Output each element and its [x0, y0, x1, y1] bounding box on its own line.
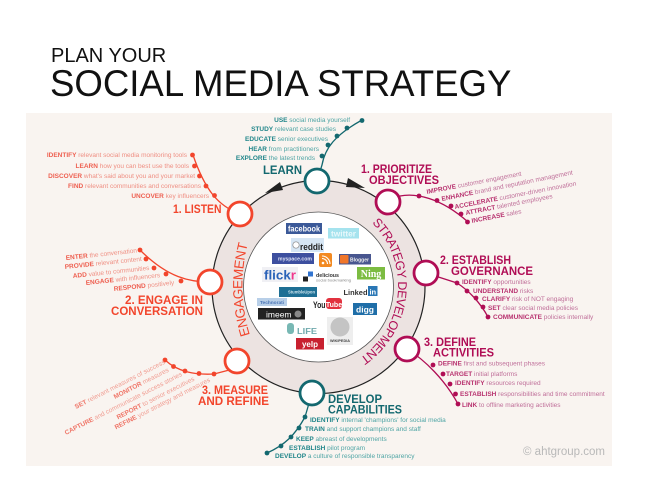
- prioritize items: [426, 169, 577, 225]
- listen items: FIND relevant communities and conversations: [68, 183, 202, 190]
- engage items: [64, 248, 175, 293]
- listen heading: 1. LISTEN: [173, 202, 222, 216]
- logo: reddit: reddit: [300, 242, 323, 252]
- develop items: ESTABLISH pilot program: [289, 445, 365, 452]
- learn heading: LEARN: [263, 163, 302, 177]
- develop heading: [328, 392, 402, 416]
- prioritize node: [376, 190, 400, 214]
- listen branch: [47, 152, 252, 226]
- logo: linkedin: Linked: [344, 288, 368, 297]
- develop items: [275, 417, 446, 460]
- define items: TARGET initial platforms: [446, 371, 518, 378]
- define items: IDENTIFY resources required: [455, 380, 541, 387]
- logo: second life: LIFE: [297, 327, 318, 336]
- measure heading: 3. MEASURE: [202, 383, 268, 397]
- logo: imeem: imeem: [266, 310, 292, 320]
- prioritize heading: [361, 162, 439, 187]
- prioritize items: ENHANCE brand and reputation management: [441, 169, 574, 203]
- logo: small blue badge: Technorati: [260, 300, 284, 305]
- governance heading: 2. ESTABLISH: [440, 253, 511, 267]
- engage items: PROVIDE relevant content: [64, 256, 142, 271]
- develop items: DEVELOP a culture of responsible transparency: [275, 453, 415, 460]
- define items: LINK to offline marketing activities: [462, 402, 561, 409]
- logo: rss: [319, 253, 332, 267]
- engage items: RESPOND positively: [113, 280, 175, 293]
- title: PLAN YOUR: [51, 45, 166, 67]
- engage heading: [111, 293, 203, 318]
- governance items: UNDERSTAND risks: [473, 288, 534, 295]
- logo: delicious: [303, 272, 351, 282]
- governance branch: [414, 253, 594, 321]
- define branch: [395, 335, 605, 409]
- define heading: ACTIVITIES: [433, 346, 494, 360]
- governance items: IDENTIFY opportunities: [462, 279, 531, 286]
- logo: youtube: You: [313, 300, 326, 310]
- measure items: [64, 359, 212, 437]
- listen node: [228, 202, 252, 226]
- logo: stumbleupon: StumbleUpon: [288, 290, 315, 294]
- prioritize heading: 1. PRIORITIZE: [361, 162, 432, 176]
- measure items: SET relevant measures of success: [74, 359, 167, 411]
- measure heading: [198, 383, 269, 408]
- measure heading: AND REFINE: [198, 394, 269, 408]
- measure branch: [64, 349, 269, 437]
- engage heading: 2. ENGAGE IN: [125, 293, 203, 307]
- logo: yelp: yelp: [302, 340, 318, 349]
- governance items: [462, 279, 594, 321]
- engage items: ADD value to communities: [72, 265, 150, 280]
- learn items: [236, 117, 350, 162]
- engage items: ENGAGE with influencers: [85, 272, 161, 287]
- learn node: [305, 169, 329, 193]
- measure items: REFINE your strategy and measures: [114, 376, 212, 431]
- title: SOCIAL MEDIA STRATEGY: [50, 63, 511, 104]
- measure items: REPORT to senior executives: [116, 376, 197, 421]
- learn items: EXPLORE the latest trends: [236, 155, 316, 162]
- logo: myspace: myspace.com: [278, 256, 312, 262]
- develop heading: CAPABILITIES: [328, 402, 402, 416]
- develop node: [300, 381, 324, 405]
- define heading: [424, 335, 494, 360]
- ring labels: ENGAGEMENT: [233, 242, 250, 336]
- engage node: [198, 270, 222, 294]
- branch dots: [455, 281, 490, 319]
- governance items: SET clear social media policies: [488, 305, 579, 312]
- engage heading: CONVERSATION: [111, 304, 203, 318]
- prioritize heading: OBJECTIVES: [369, 173, 439, 187]
- engage branch: [64, 248, 222, 318]
- learn items: STUDY relevant case studies: [251, 126, 337, 133]
- governance heading: GOVERNANCE: [451, 264, 533, 278]
- engage items: ENTER the conversation: [65, 248, 138, 262]
- learn branch: [236, 117, 364, 193]
- develop items: TRAIN and support champions and staff: [305, 426, 421, 433]
- develop heading: DEVELOP: [328, 392, 382, 406]
- measure node: [225, 349, 249, 373]
- develop items: KEEP abreast of developments: [296, 436, 387, 443]
- learn items: EDUCATE senior executives: [245, 136, 329, 143]
- prioritize items: ATTRACT talented employees: [465, 193, 554, 217]
- learn items: USE social media yourself: [274, 117, 350, 124]
- logo: twitter: twitter: [331, 230, 356, 238]
- listen items: UNCOVER key influencers: [131, 193, 210, 200]
- prioritize items: INCREASE sales: [471, 208, 523, 225]
- governance items: CLARIFY risk of NOT engaging: [482, 296, 574, 303]
- listen items: IDENTIFY relevant social media monitoring tools: [47, 152, 188, 159]
- governance heading: [440, 253, 533, 278]
- branch dots: [320, 118, 364, 158]
- governance items: COMMUNICATE policies internally: [493, 314, 594, 321]
- logo: linkedin: [344, 286, 378, 297]
- logo: digg: digg: [356, 304, 374, 314]
- define node: [395, 337, 419, 361]
- prioritize branch: [361, 162, 577, 225]
- develop items: IDENTIFY internal 'champions' for social media: [310, 417, 446, 424]
- title: [50, 45, 511, 104]
- governance node: [414, 261, 438, 285]
- listen items: LEARN how you can best use the tools: [76, 163, 190, 170]
- logo: blogger: Blogger: [350, 258, 370, 264]
- define heading: 3. DEFINE: [424, 335, 476, 349]
- logo: wikipedia: WIKIPEDIA: [330, 339, 350, 343]
- logo: delicious: delicious: [316, 273, 339, 279]
- social media logos: [257, 223, 385, 350]
- prioritize items: ACCELERATE customer-driven innovation: [454, 180, 577, 211]
- define items: DEFINE first and subsequent phases: [438, 360, 546, 368]
- learn items: HEAR from practitioners: [249, 146, 320, 153]
- branch dots: [431, 363, 460, 406]
- listen items: DISCOVER what's said about you and your market: [48, 173, 195, 180]
- branch dots: [138, 248, 183, 283]
- ring labels: STRATEGY DEVELOPMENT: [362, 218, 407, 365]
- branch dots: [190, 153, 217, 198]
- prioritize items: IMPROVE customer engagement: [426, 171, 522, 196]
- copyright: © ahtgroup.com: [523, 446, 605, 458]
- central ring: [212, 178, 425, 394]
- logo: delicious: social bookmarking: [316, 278, 351, 282]
- measure items: CAPTURE and communicate success stories: [64, 371, 184, 437]
- logo: youtube: Tube: [326, 302, 342, 309]
- arrows near learn: [265, 178, 365, 193]
- branch dots: [163, 358, 216, 376]
- logo: flickr: flickr: [264, 268, 296, 282]
- ring labels: [233, 218, 407, 365]
- listen items: [47, 152, 210, 200]
- logo: facebook: facebook: [288, 224, 320, 234]
- logo: ning: Ning: [361, 269, 381, 280]
- measure items: MONITOR measures: [113, 367, 171, 401]
- develop branch: [265, 381, 446, 460]
- branch dots: [265, 415, 307, 455]
- logo: youtube: [313, 298, 342, 310]
- panel: strategy background: [26, 113, 612, 466]
- define items: [438, 360, 605, 409]
- branch dots: [417, 194, 470, 224]
- logo: linkedin: in: [369, 288, 377, 296]
- define items: ESTABLISH responsibilities and time commitment: [460, 391, 605, 398]
